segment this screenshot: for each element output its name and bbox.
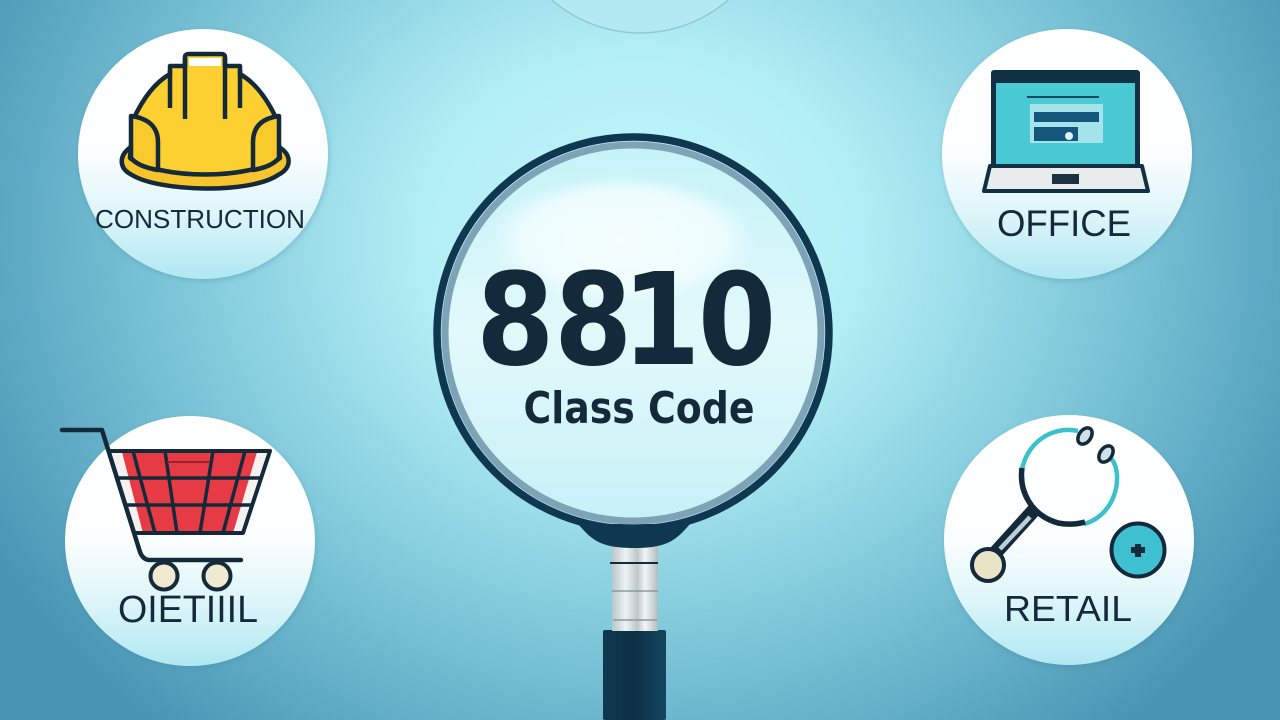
- magnifying glass: [437, 137, 829, 720]
- label: retail: RETAIL: [1004, 588, 1132, 629]
- icon: laptop: [984, 70, 1148, 191]
- number: 8810: [476, 246, 776, 395]
- icon: shopping cart: [62, 430, 270, 590]
- icon: stethoscope: [972, 425, 1164, 581]
- panel disc: office: [942, 29, 1192, 279]
- panel: construction: [78, 29, 329, 281]
- panel disc: cart: [65, 416, 315, 666]
- icon: handle: [603, 545, 666, 720]
- icon: hard hat: [122, 54, 289, 189]
- label: garbled retail: OIETIIIL: [118, 589, 258, 631]
- panel disc: retail: [944, 415, 1194, 665]
- lens neck: [578, 524, 690, 548]
- label: construction: CONSTRUCTION: [95, 204, 305, 234]
- panel disc: construction: [78, 29, 328, 279]
- panel: office: [942, 29, 1193, 281]
- metal collar: [612, 545, 658, 631]
- lens rim: [437, 137, 829, 529]
- subtitle: Class Code: [524, 383, 754, 434]
- label: office: OFFICE: [997, 203, 1131, 244]
- lens: [445, 145, 821, 521]
- panel: retail: [944, 415, 1195, 668]
- partial circle at top edge: [506, 0, 774, 33]
- lens glare: [487, 174, 757, 306]
- panel: cart: [62, 416, 316, 668]
